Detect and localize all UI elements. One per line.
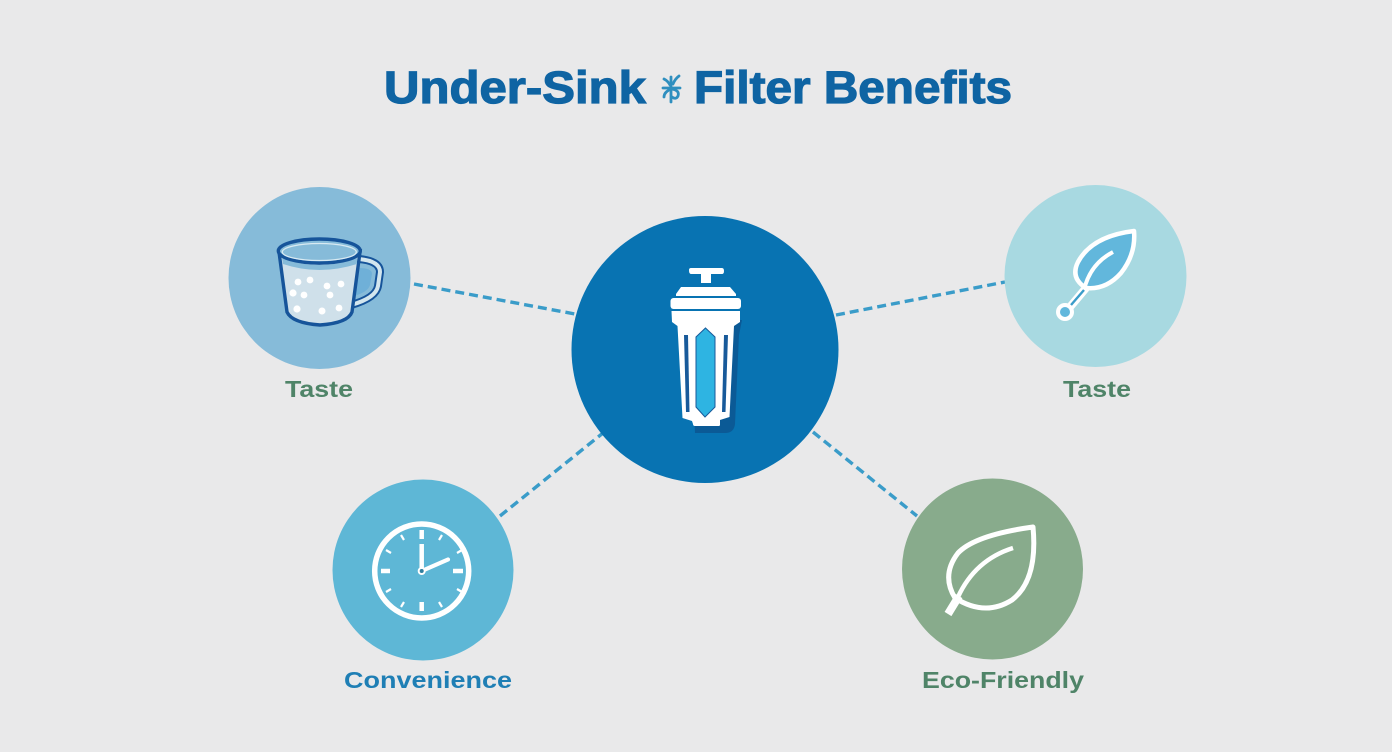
- label: taste left: Taste: [285, 376, 353, 402]
- icon: cup of water: [278, 239, 380, 325]
- panel: eco-friendly: [902, 478, 1084, 693]
- dashed connectors: [414, 282, 1005, 516]
- label: convenience: Convenience: [344, 667, 512, 693]
- icon: leaf with stem: [1058, 231, 1134, 319]
- panel: convenience: [332, 480, 514, 693]
- panel: taste cup: [228, 187, 410, 402]
- label: eco-friendly: Eco-Friendly: [922, 667, 1084, 693]
- title: Under-Sink: [384, 62, 647, 113]
- title: Filter Benefits: [694, 62, 1012, 113]
- icon: title ornament: [663, 76, 680, 102]
- icon: water filter cartridge: [670, 268, 742, 433]
- icon: leaf: [948, 527, 1034, 614]
- label: taste right: Taste: [1063, 376, 1131, 402]
- icon: clock: [375, 524, 469, 618]
- panel: central filter: [572, 216, 838, 483]
- title: [384, 62, 1012, 113]
- panel: taste leaf: [1004, 185, 1186, 402]
